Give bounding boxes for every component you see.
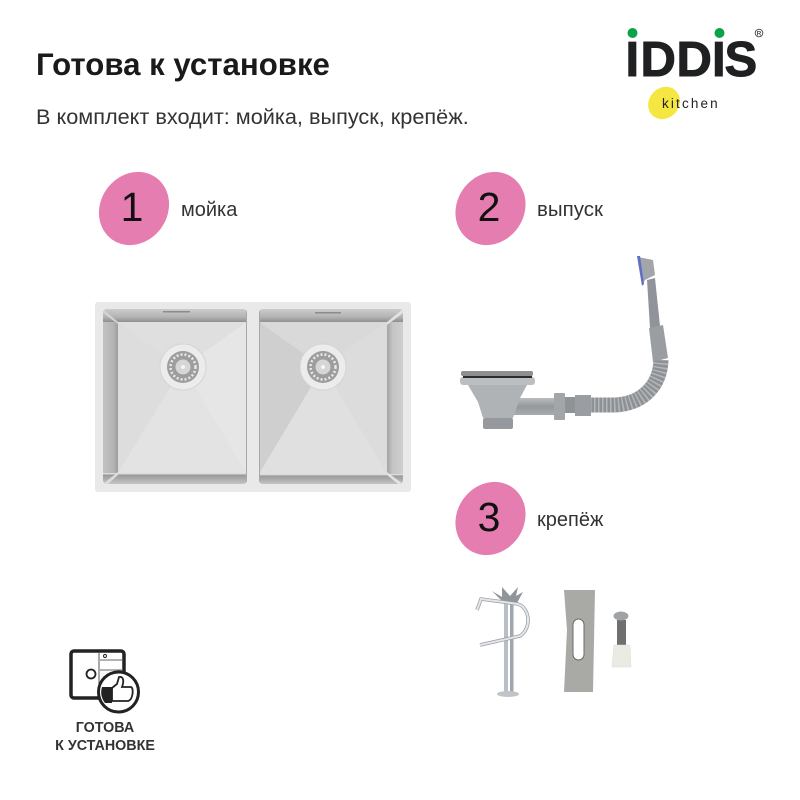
screw with plug — [612, 612, 631, 667]
subtitle: В комплект входит: мойка, выпуск, крепёж. — [36, 104, 469, 129]
right bowl — [259, 309, 403, 484]
label: мойка: мойка — [181, 199, 238, 221]
strainer rim — [460, 377, 535, 385]
title: Готова к установке — [36, 47, 330, 82]
icon: iddis kitchen logo: IDDIS — [626, 33, 757, 87]
caption: ready to install — [55, 720, 155, 754]
badge 1: 1 — [121, 184, 143, 230]
strainer body — [468, 385, 527, 418]
badge 2 — [441, 158, 540, 259]
corrugated hose — [590, 360, 661, 405]
label: выпуск: выпуск — [537, 198, 604, 221]
left bowl — [103, 309, 247, 484]
drain pipe and nuts — [505, 398, 555, 415]
label: крепёж: крепёж — [537, 509, 604, 531]
icon: iddis kitchen logo: kitchen — [662, 96, 720, 111]
overflow tube — [647, 278, 660, 328]
sink image — [95, 302, 411, 492]
caption: ready to install: ГОТОВА — [76, 720, 134, 736]
caption: ready to install: К УСТАНОВКЕ — [55, 738, 155, 754]
mounting plate — [564, 590, 595, 692]
drain assembly image — [460, 256, 668, 429]
icon: iddis kitchen logo: R — [757, 30, 762, 38]
badge 3: 3 — [478, 494, 500, 540]
icon: iddis kitchen logo — [626, 28, 763, 126]
badge 3 — [441, 468, 540, 569]
badge 2: 2 — [478, 184, 500, 230]
icon: ready to install — [71, 651, 138, 712]
left drain — [160, 344, 206, 390]
overflow cap — [638, 257, 655, 285]
right drain — [300, 344, 346, 390]
mounting clamp — [477, 587, 528, 697]
badge 1 — [85, 158, 183, 259]
